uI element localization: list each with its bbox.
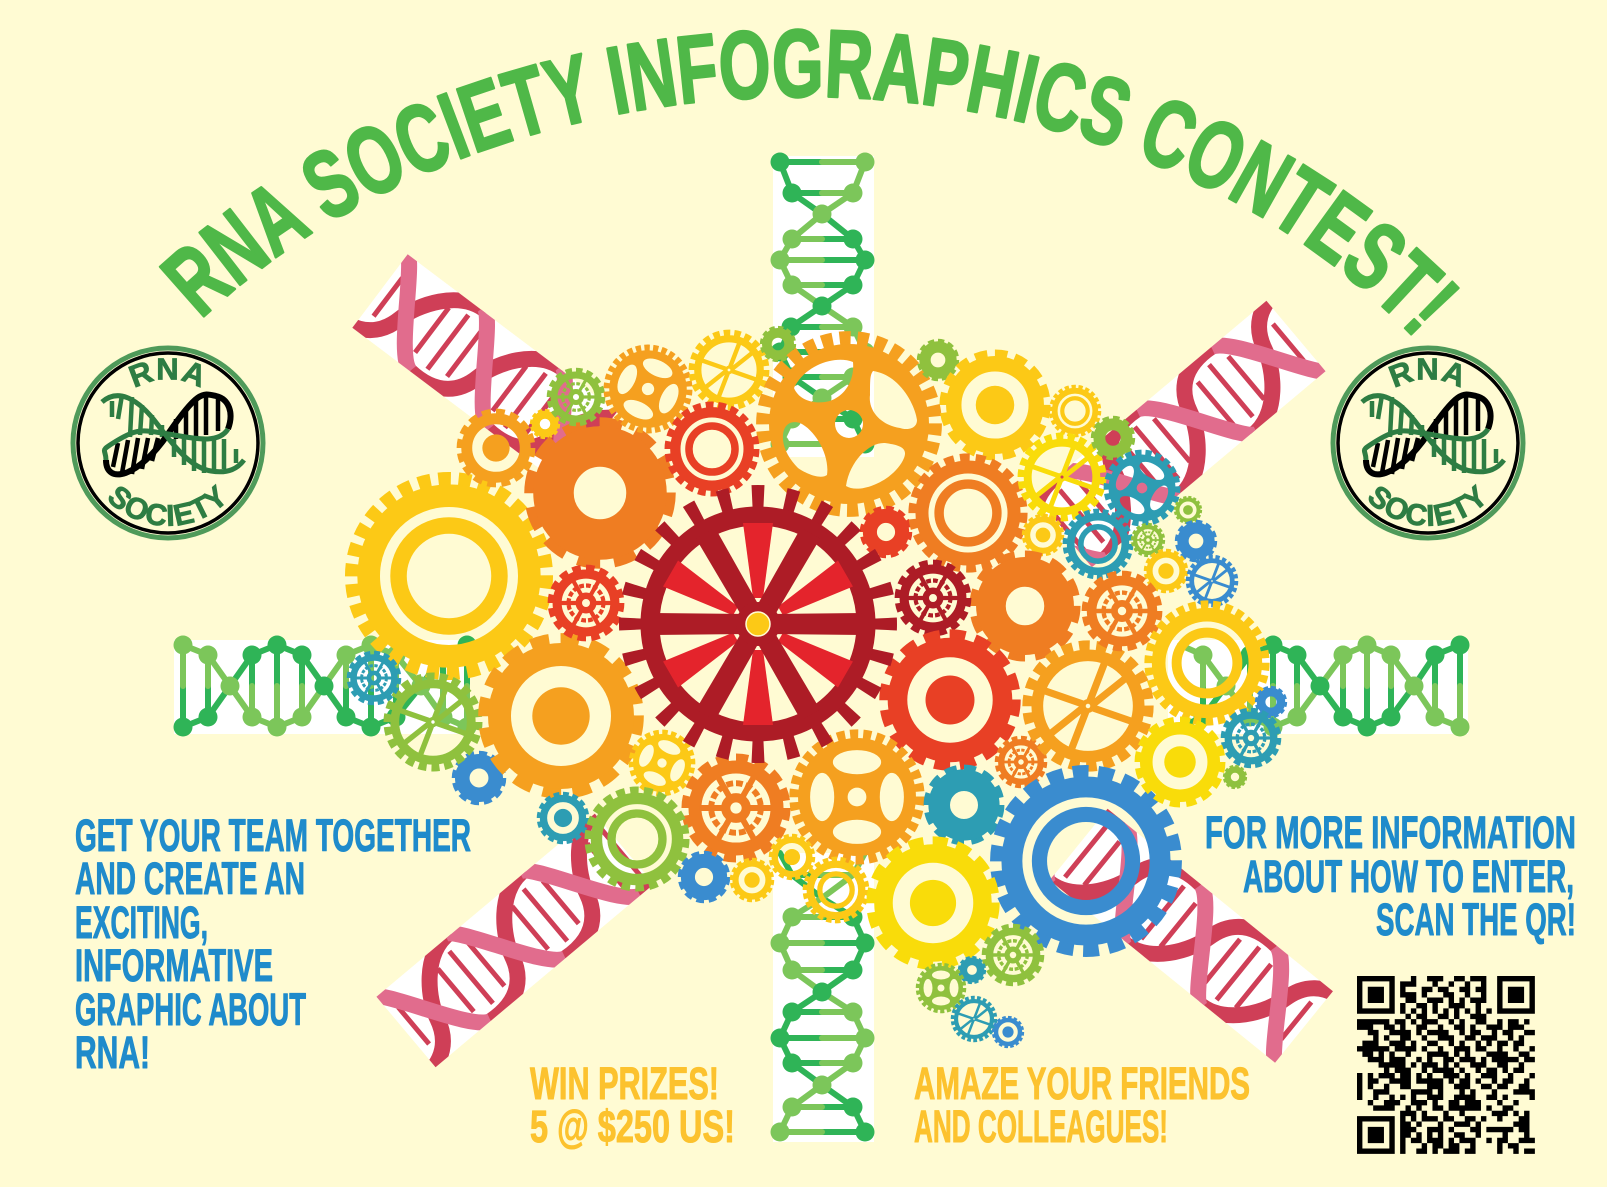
gear: blue small right (1256, 687, 1286, 717)
gear: yellow four hole (621, 722, 703, 804)
text block: win prizes: 5 @ $250 US! (530, 1101, 735, 1152)
text block: get your team together: GRAPHIC ABOUT (75, 984, 306, 1035)
logo: right RNA Society badge (1333, 348, 1523, 538)
gear cluster (349, 327, 1286, 1047)
DNA ribbon: upper right pink (1039, 300, 1326, 567)
DNA strand: top green (773, 156, 874, 457)
gear: lime four hole (918, 965, 964, 1011)
gear: tiny lime lace (1132, 524, 1164, 556)
gear: small orange lace (997, 738, 1045, 786)
text block: amaze your friends: AND COLLEAGUES! (914, 1101, 1168, 1152)
gear: blue (680, 853, 728, 901)
gear: tiny lime ring (1175, 497, 1201, 523)
gear: lime right (1093, 418, 1133, 458)
gear: orange lace big (686, 758, 786, 858)
gear: blue right (1176, 521, 1216, 561)
gear: tiny lime (761, 327, 795, 361)
gear: small lime (918, 340, 958, 380)
gear: red ring (668, 405, 756, 493)
text block: win prizes: WIN PRIZES! (530, 1058, 719, 1109)
gear: red target (885, 635, 1015, 765)
gear: tiny yellow (531, 410, 559, 438)
gear: blue small (454, 753, 504, 803)
title: RNA SOCIETY INFOGRAPHICS CONTEST! (158, 28, 1460, 336)
gear: yellow right small (1146, 551, 1186, 591)
gear: lime lace (549, 370, 603, 424)
gear: orange four hole large (795, 735, 919, 859)
gear: orange solid (530, 423, 670, 563)
DNA strand: right green (1168, 640, 1468, 734)
gear: bright yellow target (872, 842, 994, 964)
gear: orange solid right (974, 555, 1076, 657)
gear: teal ring (1065, 511, 1131, 577)
DNA strand: left green (174, 640, 468, 734)
gear: large orange with holes (763, 338, 935, 510)
gear: teal tiny (959, 957, 985, 983)
gear: orange four hole (594, 335, 702, 443)
gear: bright yellow spokes (1021, 436, 1103, 518)
DNA ribbon: lower left pink (376, 814, 650, 1068)
gear: big yellow ring (353, 480, 545, 672)
text block: get your team together: INFORMATIVE (75, 940, 273, 991)
logo: left RNA Society badge (73, 348, 263, 538)
gear: yellow big ring right (1149, 605, 1265, 721)
gear: tiny lime right (1224, 766, 1246, 788)
gear: yellow small target (732, 860, 772, 900)
gear: teal small target (539, 794, 587, 842)
QR code (1357, 976, 1535, 1154)
gear: bright yellow right (1138, 720, 1222, 804)
gear: small red (862, 508, 910, 556)
gear: lime lace lower (984, 926, 1042, 984)
gear: big blue ring (998, 773, 1174, 949)
text block: get your team together: AND CREATE AN (75, 853, 305, 904)
gear: teal spokes (953, 998, 995, 1040)
gear: orange target (485, 640, 637, 792)
DNA strand: bottom green (773, 853, 874, 1142)
gear: yellow spokes (692, 333, 766, 407)
gear: blue spokes (1188, 557, 1236, 605)
gear: dark red lace (898, 563, 968, 633)
DNA ribbon: upper left pink (352, 254, 617, 468)
text block: get your team together: RNA! (75, 1027, 150, 1078)
text block: amaze your friends: AMAZE YOUR FRIENDS (914, 1058, 1250, 1109)
text block: get your team together: GET YOUR TEAM TOGETHER (75, 810, 471, 861)
gear: teal lace right (1223, 710, 1279, 766)
gear: orange lace right (1085, 574, 1159, 648)
gear: central dark red wheel (632, 498, 884, 750)
text block: get your team together: EXCITING, (75, 897, 208, 948)
gear: small yellow target (1023, 515, 1063, 555)
gear: orange ring (913, 458, 1023, 568)
gear: blue tiny ring (993, 1017, 1023, 1047)
gear: yellow target (944, 354, 1046, 456)
gear: yellow ring over green (805, 859, 867, 921)
gear: red lace (551, 568, 621, 638)
gear: teal four hole (1094, 440, 1190, 536)
gear: lime spokes (387, 676, 479, 768)
gear: yellow over green (771, 836, 813, 878)
gear: teal solid (927, 768, 1001, 842)
gear: orange spokes large (1028, 646, 1148, 766)
gear: orange ring small (460, 412, 532, 484)
gear: lime ring (589, 791, 685, 887)
gear: tiny yellow ring (1051, 387, 1099, 435)
gear: teal lace (349, 653, 399, 703)
DNA ribbon: lower right pink (1051, 808, 1333, 1063)
